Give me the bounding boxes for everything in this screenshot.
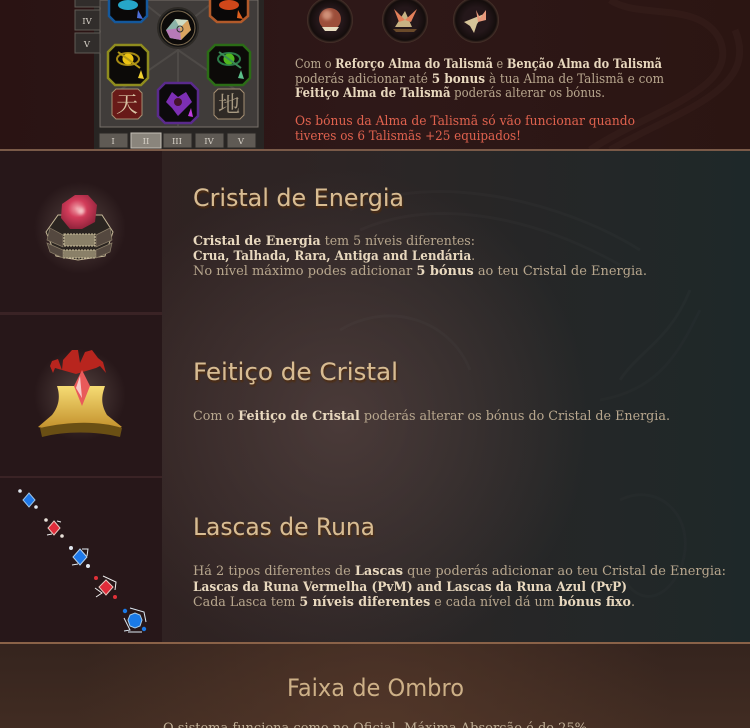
- panel: talisman soul section: [0, 0, 750, 150]
- talisman inventory window: [75, 0, 264, 150]
- panel: shoulder sash section: [0, 644, 750, 728]
- text: crystal description: Crua, Talhada, Rara, Antiga and Lendária.: [193, 249, 475, 264]
- panel: crystal sections background: [0, 151, 750, 642]
- slot: yellow talisman: [108, 45, 148, 85]
- text: talisman soul description: [295, 57, 664, 101]
- page tabs: II: [143, 137, 149, 147]
- icon: blessing star: [382, 0, 428, 43]
- icon: crystal spell: [34, 349, 126, 441]
- text: rune shards description: [193, 564, 726, 610]
- text: red warning: [295, 114, 635, 144]
- shard red 2: [94, 576, 117, 599]
- shard blue 2: [69, 546, 90, 568]
- text: crystal spell description: Com o Feitiço de Cristal poderás alterar os bónus do Cristal de Energia.: [193, 409, 670, 424]
- text: rune shards description: Lascas da Runa Vermelha (PvM) and Lascas da Runa Azul (PvP): [193, 580, 627, 595]
- icon: reinforcement orb: [307, 0, 353, 43]
- text: rune shards description: Há 2 tipos diferentes de Lascas que poderás adicionar ao teu Cristal de Energia:: [193, 564, 726, 579]
- side tabs: IV: [82, 17, 93, 27]
- page tabs: I: [111, 137, 115, 147]
- heading: Lascas de Runa: Lascas de Runa: [193, 513, 375, 541]
- text: rune shards description: Cada Lasca tem 5 níveis diferentes e cada nível dá um bónus fixo.: [193, 595, 635, 610]
- slot: purple talisman: [158, 83, 198, 123]
- icon: spell star: [453, 0, 499, 43]
- shard blue 3: [123, 608, 146, 632]
- shard red 1: [44, 518, 64, 538]
- shard blue 1: [18, 489, 38, 509]
- icon: energy crystal: [34, 182, 126, 274]
- page tabs: III: [172, 137, 182, 147]
- text: talisman soul description: Feitiço Alma de Talismã poderás alterar os bónus.: [295, 86, 605, 101]
- text: red warning: Os bónus da Alma de Talismã só vão funcionar quando: [295, 114, 635, 129]
- side tabs: V: [83, 40, 91, 50]
- text: crystal description: Cristal de Energia tem 5 níveis diferentes:: [193, 234, 475, 249]
- text: crystal description: No nível máximo podes adicionar 5 bónus ao teu Cristal de Energia.: [193, 264, 647, 279]
- slot: orange talisman: [210, 0, 248, 22]
- text: crystal description: [193, 234, 647, 279]
- slot: blue talisman: [109, 0, 147, 22]
- icon: rune shards: [18, 489, 146, 632]
- page tabs: IV: [204, 137, 215, 147]
- text: talisman soul description: poderás adicionar até 5 bonus à tua Alma de Talismã e com: [295, 72, 664, 87]
- seal: earth: 地: [218, 88, 240, 119]
- side tabs: [75, 0, 100, 53]
- page tabs: V: [237, 137, 245, 147]
- heading: Faixa de Ombro: Faixa de Ombro: [287, 674, 464, 702]
- heading: Feitiço de Cristal: Feitiço de Cristal: [193, 358, 398, 386]
- slot: green talisman: [208, 45, 250, 85]
- text: red warning: tiveres os 6 Talismãs +25 equipados!: [295, 129, 521, 144]
- text: talisman soul description: Com o Reforço Alma do Talismã e Benção Alma do Talismã: [295, 57, 662, 72]
- page tabs: [99, 133, 256, 148]
- central soul gem: [158, 8, 198, 48]
- seal: heaven: 天: [116, 88, 138, 119]
- heading: Cristal de Energia: Cristal de Energia: [193, 184, 404, 212]
